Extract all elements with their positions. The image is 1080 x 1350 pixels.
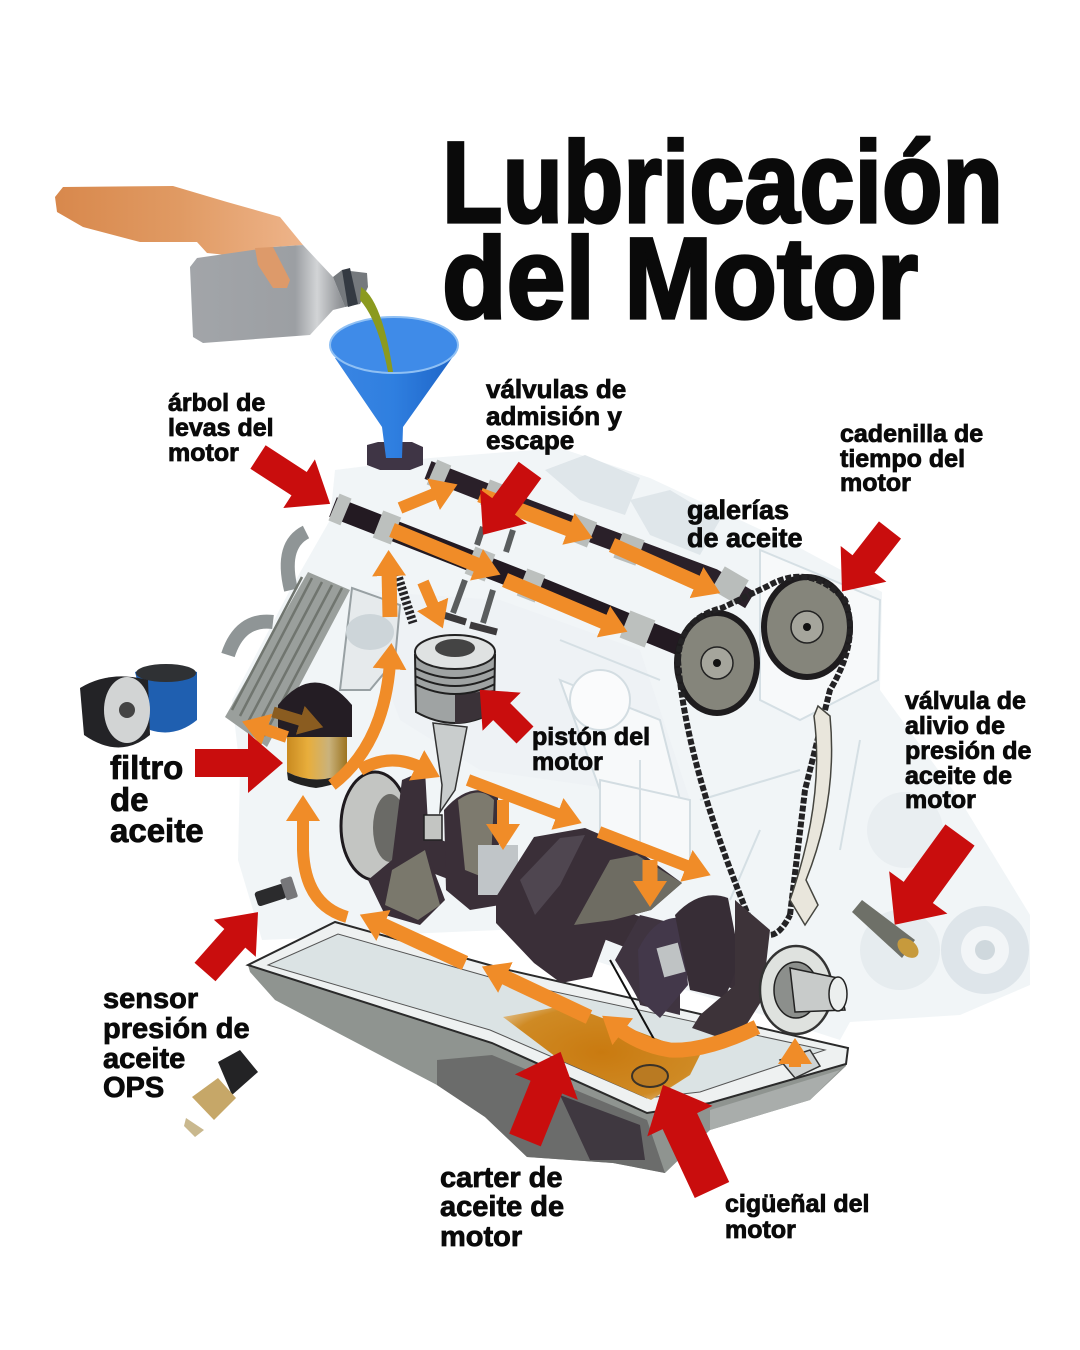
pressure relief valve (852, 900, 922, 962)
label: árbol de levas del motor: motor (168, 439, 239, 467)
label: sensor presión de aceite OPS: OPS (103, 1072, 164, 1104)
red arrow: pistón (461, 671, 544, 754)
red arrow: sensor (184, 894, 279, 991)
engine block: ghosted background (232, 448, 1030, 1040)
spare oil filters (80, 664, 197, 748)
title: Lubricación (442, 118, 1003, 247)
label: sensor presión de aceite OPS: aceite (103, 1043, 185, 1075)
label: cigüeñal del motor: motor (725, 1216, 796, 1244)
red arrow: cigüeñal (630, 1070, 745, 1205)
label: válvulas de admisión y escape: admisión y (486, 401, 622, 431)
title: del Motor (442, 214, 918, 343)
title (442, 118, 1003, 343)
oil bottle (190, 245, 368, 343)
red arrow: cadenilla (819, 512, 913, 609)
timing gears (677, 577, 850, 713)
label: carter de aceite de motor: motor (440, 1221, 522, 1253)
oil cooler (225, 572, 400, 747)
hand fingers over bottle (255, 247, 290, 288)
red arrow: árbol de levas (242, 433, 346, 528)
camshaft rear (428, 470, 750, 600)
label: válvulas de admisión y escape: válvulas de (486, 374, 626, 404)
piston (415, 635, 495, 812)
orange oil flow arrows (261, 492, 795, 1067)
red arrow: carter (493, 1039, 592, 1153)
label: filtro de aceite: filtro (110, 749, 183, 786)
label: válvula de alivio: motor (905, 786, 976, 814)
label: carter de aceite de motor: carter de (440, 1162, 563, 1194)
oil stream (360, 287, 393, 372)
crankshaft (341, 770, 770, 1050)
timing chain (678, 577, 850, 935)
label: galerías de aceite: de aceite (687, 523, 803, 553)
label: pistón del motor: motor (532, 748, 603, 776)
red arrow: válvula de alivio (866, 814, 989, 946)
oil filter (278, 682, 352, 788)
label: cadenilla de tiempo del motor: motor (840, 469, 911, 497)
label: árbol de levas del motor: levas del (168, 414, 274, 442)
hoses (228, 532, 306, 655)
label: válvulas de admisión y escape: escape (486, 425, 574, 455)
label: filtro de aceite: aceite (110, 812, 204, 849)
OPS sensor photo (184, 1050, 258, 1137)
label: carter de aceite de motor: aceite de (440, 1191, 564, 1223)
oil pressure sensor in engine (254, 876, 298, 907)
label: pistón del motor: pistón del (532, 723, 650, 751)
label: cigüeñal del motor: cigüeñal del (725, 1190, 869, 1218)
label: cadenilla de tiempo del motor: cadenilla de (840, 420, 983, 448)
label: válvula de alivio: válvula de (905, 687, 1026, 715)
valves and rockers (397, 527, 513, 632)
camshaft front (333, 507, 680, 645)
oil pan (248, 922, 848, 1173)
funnel (330, 317, 458, 470)
label: sensor presión de aceite OPS: presión de (103, 1013, 250, 1045)
label: válvula de alivio: alivio de (905, 712, 1005, 740)
label: cadenilla de tiempo del motor: tiempo del (840, 445, 965, 473)
label: válvula de alivio: aceite de (905, 762, 1012, 790)
oil pump and crank pulley (760, 946, 847, 1034)
hand (55, 186, 303, 288)
label: árbol de levas del motor: árbol de (168, 389, 265, 417)
label: sensor presión de aceite OPS: sensor (103, 983, 198, 1015)
label: filtro de aceite: de (110, 781, 149, 818)
label: válvula de alivio: presión de (905, 737, 1032, 765)
chain tensioner (790, 706, 832, 925)
red arrow: filtro (195, 733, 283, 793)
label: galerías de aceite: galerías (687, 495, 789, 525)
red arrow: válvulas (460, 453, 553, 552)
